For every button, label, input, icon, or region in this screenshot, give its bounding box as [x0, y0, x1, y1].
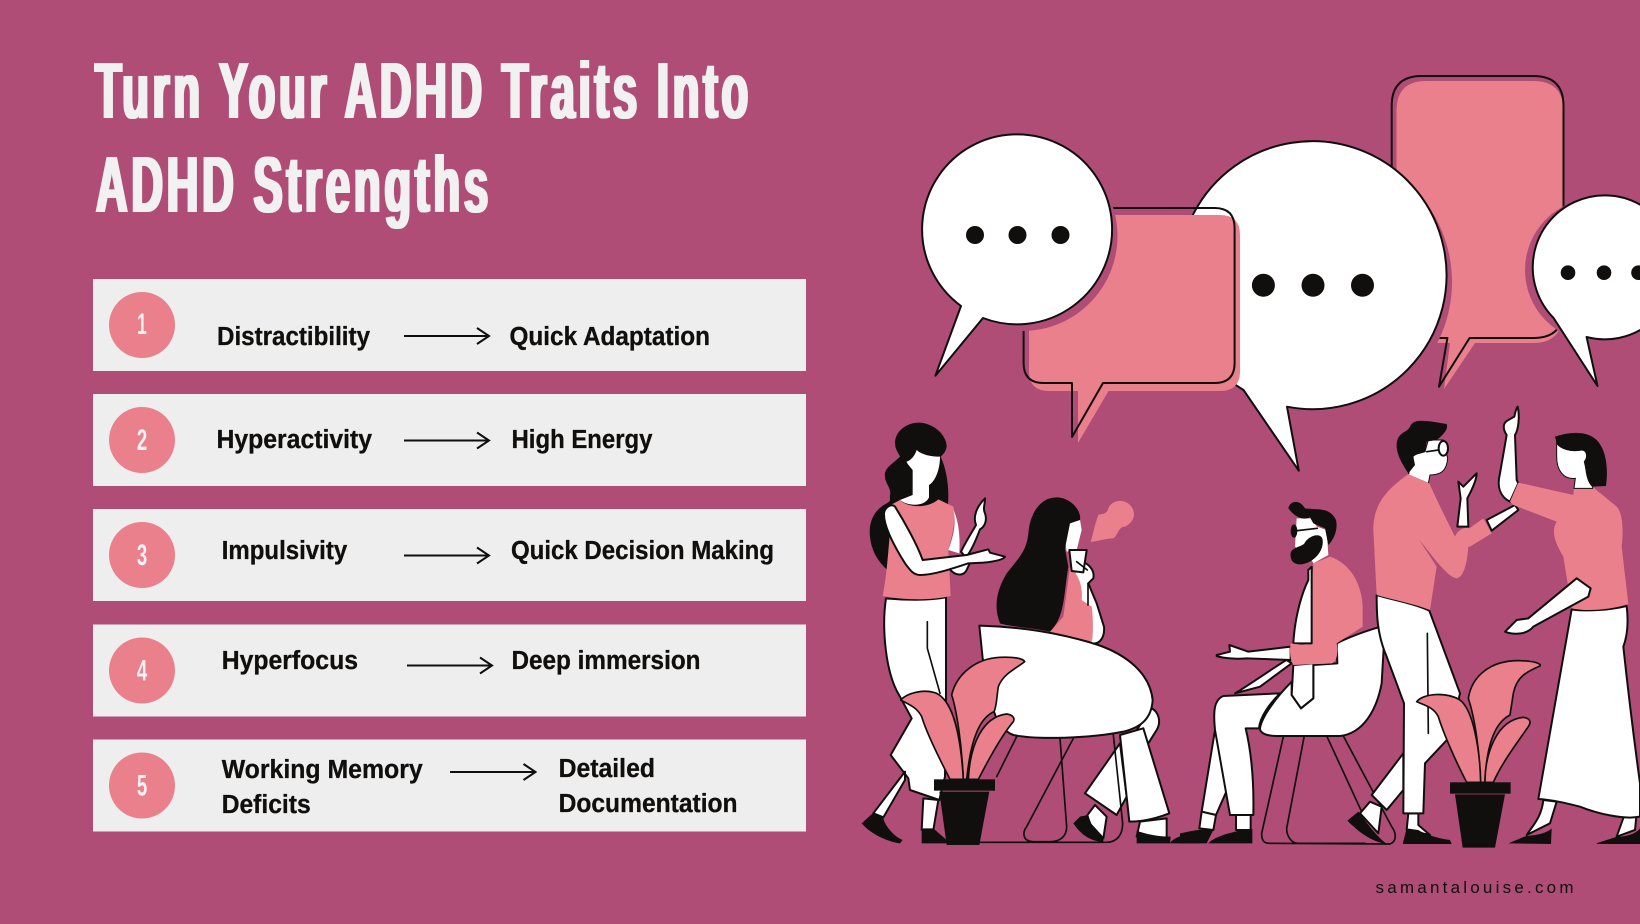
- row 1: distractibility to quick adaptation: Distractibility: [217, 323, 371, 351]
- row 5: working memory deficits to detailed documentation: Working Memory: [222, 756, 423, 784]
- row 3: impulsivity to quick decision making: 3: [137, 539, 147, 572]
- title: ADHD Strengths: [96, 140, 492, 229]
- row 3: impulsivity to quick decision making: [93, 509, 806, 601]
- title: [95, 46, 752, 229]
- row 5: working memory deficits to detailed documentation: Documentation: [559, 790, 738, 818]
- row 5: working memory deficits to detailed documentation: [93, 740, 806, 832]
- title: Turn Your ADHD Traits Into: [95, 46, 752, 135]
- row 4: hyperfocus to deep immersion: Hyperfocus: [222, 647, 358, 675]
- people: right group: [1180, 407, 1640, 848]
- row 4: hyperfocus to deep immersion: Deep immersion: [512, 647, 700, 675]
- row 1: distractibility to quick adaptation: Quick Adaptation: [510, 323, 710, 351]
- person: standing man with glasses: [1347, 421, 1518, 844]
- row 2: hyperactivity to high energy: [93, 394, 806, 486]
- speech bubble: pink centre: [1024, 208, 1240, 443]
- row 1: distractibility to quick adaptation: [93, 279, 806, 371]
- person: seated woman with cup: [979, 497, 1200, 843]
- row 5: working memory deficits to detailed documentation: Detailed: [559, 755, 655, 783]
- speech bubble: large white: [1179, 141, 1452, 471]
- row 1: distractibility to quick adaptation: 1: [137, 308, 147, 341]
- icon: potted plant right: [1417, 661, 1540, 848]
- row 2: hyperactivity to high energy: High Energy: [512, 426, 653, 454]
- person: woman with raised hand: [1499, 407, 1640, 844]
- speech bubble: white right: [1525, 195, 1640, 386]
- row 2: hyperactivity to high energy: 2: [137, 424, 147, 457]
- row 4: hyperfocus to deep immersion: [93, 624, 806, 716]
- people: left group: [862, 423, 1200, 845]
- speech bubble: pink top right: [1392, 76, 1564, 389]
- row 3: impulsivity to quick decision making: Impulsivity: [222, 537, 348, 565]
- row 5: working memory deficits to detailed documentation: Deficits: [222, 791, 311, 819]
- footer website: samantalouise.com: [1376, 878, 1574, 897]
- row 5: working memory deficits to detailed documentation: 5: [137, 769, 147, 803]
- icon: potted plant left: [901, 657, 1025, 845]
- person: standing woman: [862, 423, 1005, 843]
- speech bubble: white left: [922, 134, 1118, 376]
- row 2: hyperactivity to high energy: Hyperactivity: [216, 426, 373, 454]
- row 3: impulsivity to quick decision making: Quick Decision Making: [511, 537, 774, 565]
- person: seated man with beard: [1180, 502, 1395, 844]
- row 4: hyperfocus to deep immersion: 4: [137, 654, 147, 688]
